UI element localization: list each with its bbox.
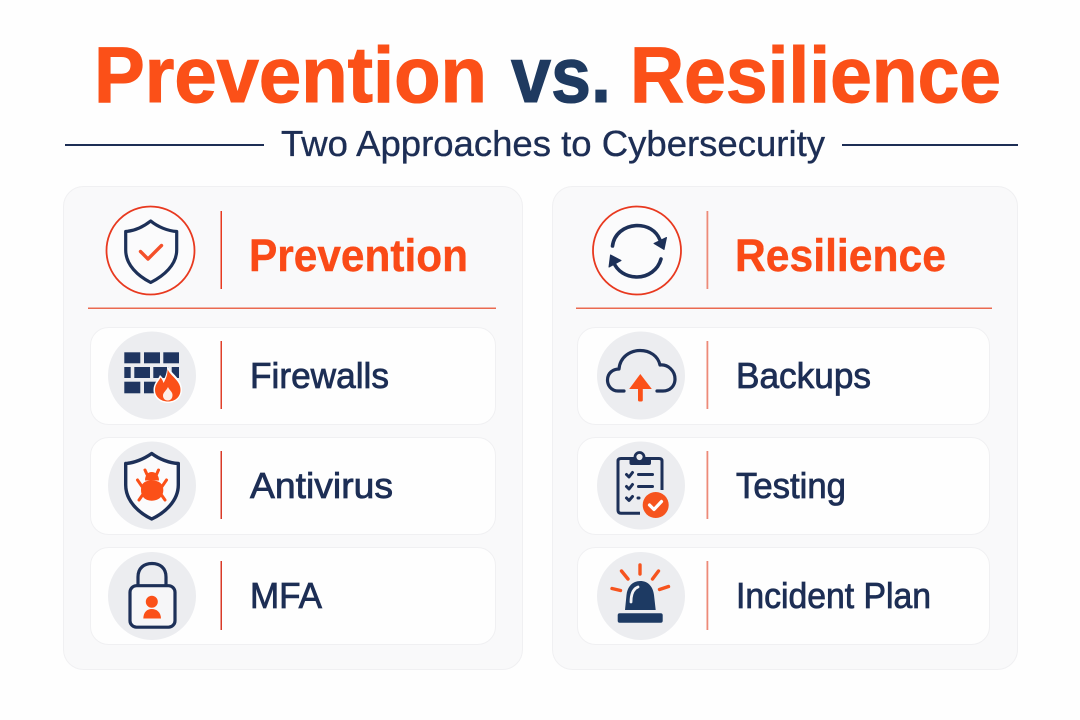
subtitle: Two Approaches to Cybersecurity <box>281 123 825 164</box>
title: Prevention <box>94 30 487 119</box>
label: firewalls: Firewalls <box>250 355 389 396</box>
card: backups <box>578 328 990 424</box>
card: mfa <box>90 548 496 644</box>
title: Resilience <box>630 30 1001 119</box>
icon: lock with user <box>130 564 175 627</box>
title: vs. <box>511 30 611 119</box>
icon: cloud upload <box>608 350 675 402</box>
icon: shield with check <box>106 206 194 294</box>
label: incident plan: Incident Plan <box>736 575 931 616</box>
label: backups: Backups <box>736 355 871 396</box>
label: mfa: MFA <box>250 575 322 616</box>
icon: alarm beacon <box>612 565 668 623</box>
panel: prevention <box>64 186 522 670</box>
card: incident plan <box>578 548 990 644</box>
panel: resilience <box>552 186 1018 670</box>
icon: checklist clipboard <box>618 452 669 518</box>
title <box>94 30 1001 119</box>
card: testing <box>578 438 990 534</box>
card: firewalls <box>90 328 496 424</box>
heading: resilience: Resilience <box>735 230 946 281</box>
icon: sync arrows <box>593 206 681 294</box>
label: testing: Testing <box>736 465 846 506</box>
card: antivirus <box>90 438 496 534</box>
label: antivirus: Antivirus <box>250 465 393 506</box>
heading: prevention: Prevention <box>249 230 468 281</box>
icon: firewall <box>124 352 182 403</box>
icon: shield with bug <box>126 454 178 519</box>
